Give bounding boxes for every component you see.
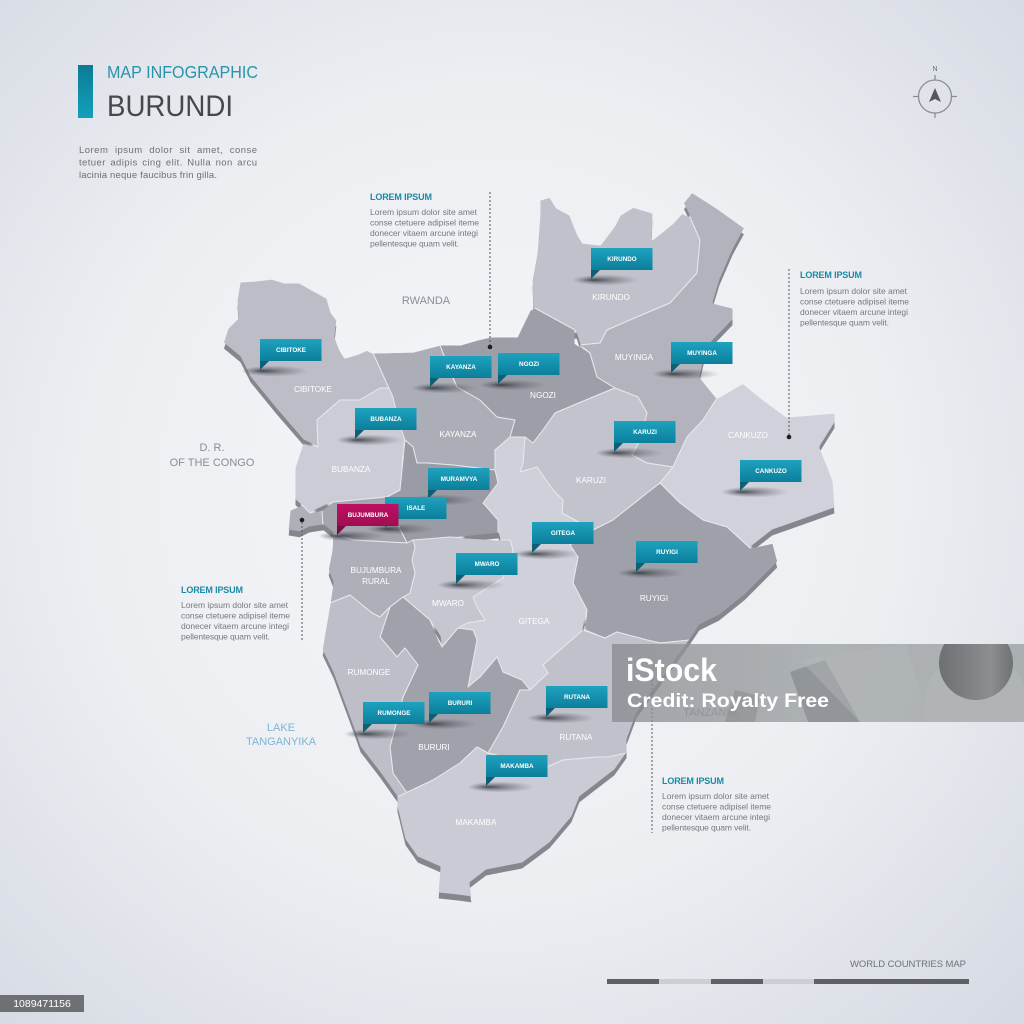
neighbouring country labels: RWANDA [402, 295, 451, 307]
region: Ngozi [440, 307, 615, 443]
region: Bubanza [295, 388, 405, 513]
intro text: lacinia neque faucibus frin gilla. [79, 170, 217, 181]
map: 3D side extrusion [223, 198, 835, 903]
flag: Cibitoke: CIBITOKE [276, 347, 306, 354]
flag: Rutana: RUTANA [564, 694, 591, 701]
flag: Gitega: GITEGA [551, 530, 576, 537]
province names on map: MWARO [432, 599, 464, 608]
flag: Muyinga [652, 342, 732, 380]
province names on map: CANKUZO [728, 431, 768, 440]
flag: Bubanza [336, 408, 416, 446]
region: Muramvya [387, 440, 498, 543]
flag: Bururi: BURURI [448, 700, 472, 707]
neighbouring country labels: TANZANIA [683, 707, 737, 719]
callout: north: Lorem ipsum dolor site amet [370, 207, 478, 217]
neighbouring country labels: LAKE [267, 722, 295, 734]
province names on map: MAKAMBA [456, 818, 497, 827]
callout: west [181, 518, 304, 642]
map: Burundi provinces [223, 192, 835, 897]
flag: Makamba: MAKAMBA [500, 763, 534, 770]
flag: Bujumbura (capital) [318, 504, 398, 542]
province names on map: GITEGA [519, 617, 550, 626]
province names on map: BUBANZA [332, 465, 371, 474]
province names on map [294, 293, 768, 827]
province names on map: KAYANZA [439, 430, 477, 439]
callout: south-east: donecer vitaem arcune integi [662, 812, 770, 822]
flag: Isale [366, 497, 446, 534]
icon: compass: N [932, 66, 938, 73]
intro text [79, 145, 257, 181]
flag: Rumonge: RUMONGE [378, 710, 410, 717]
region: Cankuzo [660, 383, 835, 548]
callout: west: pellentesque quam velit. [181, 632, 270, 642]
province names on map: NGOZI [530, 391, 556, 400]
flag: Mwaro [437, 553, 518, 590]
region: Kayanza [373, 345, 515, 470]
callout: south-east: pellentesque quam velit. [662, 822, 751, 832]
intro text: tetuer adipis cing elit. Nulla non arcu [79, 158, 257, 168]
flag: Ngozi [479, 353, 560, 390]
province names on map: BURURI [418, 743, 450, 752]
title: BURUNDI [107, 90, 233, 123]
callout: north: pellentesque quam velit. [370, 238, 459, 248]
neighbouring country labels: OF THE CONGO [170, 457, 255, 469]
callout: north: conse ctetuere adipisel iteme [370, 218, 479, 228]
title accent bar [78, 65, 93, 118]
region: Bujumbura Mairie [288, 505, 323, 532]
flag: Kirundo [572, 248, 652, 286]
callout: east: Lorem ipsum dolor site amet [800, 286, 908, 296]
callout: north: donecer vitaem arcune integi [370, 228, 478, 238]
flag: Muramvya: MURAMVYA [441, 476, 478, 483]
image id tag [0, 995, 84, 1012]
province names on map: RUYIGI [640, 594, 668, 603]
watermark banner [612, 644, 1024, 722]
title block [78, 62, 258, 123]
flag: Cibitoke [241, 339, 322, 376]
province names on map: RUTANA [559, 733, 593, 742]
neighbouring country labels: D. R. [199, 442, 225, 454]
callout: west: LOREM IPSUM [181, 585, 243, 595]
region: Mwaro [403, 537, 513, 647]
callout: west: donecer vitaem arcune integi [181, 621, 289, 631]
region: Rutana [488, 630, 690, 767]
scale bar [607, 959, 969, 984]
flag: Bururi [410, 692, 490, 730]
flag: Muramvya [409, 468, 490, 506]
flag: Cankuzo: CANKUZO [755, 468, 787, 475]
callout: south-east [652, 680, 771, 833]
callout: east: LOREM IPSUM [800, 270, 862, 280]
region: Gitega [458, 437, 593, 690]
callout: east [787, 269, 909, 439]
callout: east: conse ctetuere adipisel iteme [800, 296, 909, 306]
flag: Bujumbura (capital): BUJUMBURA [348, 512, 389, 519]
flag: Bubanza: BUBANZA [370, 416, 402, 423]
flag: Muyinga: MUYINGA [687, 350, 717, 357]
flag: Karuzi [595, 421, 676, 458]
province names on map: KARUZI [576, 476, 606, 485]
image id tag: 1089471156 [13, 998, 71, 1010]
watermark banner: iStock [626, 652, 717, 688]
region: Ruyigi [570, 483, 778, 643]
region: Karuzi [520, 388, 673, 530]
region: Muyinga [580, 192, 745, 467]
flag: Ruyigi [617, 541, 698, 578]
watermark banner: Credit: Royalty Free [627, 691, 829, 712]
callout: north [370, 192, 492, 349]
neighbouring country labels: TANGANYIKA [246, 736, 317, 748]
callout: south-east: Lorem ipsum dolor site amet [662, 791, 770, 801]
callout: south-east: LOREM IPSUM [662, 776, 724, 786]
icon: compass [913, 66, 957, 118]
scale bar: WORLD COUNTRIES MAP [850, 959, 966, 970]
province names on map: RURAL [362, 577, 390, 586]
flag: Kayanza: KAYANZA [446, 364, 476, 371]
province names on map: BUJUMBURA [351, 566, 402, 575]
callout: north: LOREM IPSUM [370, 192, 432, 202]
province names on map: MUYINGA [615, 353, 654, 362]
flag: Ngozi: NGOZI [519, 361, 539, 368]
callout: east: pellentesque quam velit. [800, 318, 889, 328]
province names on map: KIRUNDO [592, 293, 630, 302]
province names on map: CIBITOKE [294, 385, 333, 394]
flag: Karuzi: KARUZI [633, 429, 657, 436]
region: Bujumbura Rural [328, 533, 415, 617]
flag: Cankuzo [721, 460, 802, 498]
callout: west: conse ctetuere adipisel iteme [181, 610, 290, 620]
flag: Ruyigi: RUYIGI [656, 549, 678, 556]
flag: Rutana [527, 686, 608, 724]
region: Bururi [380, 597, 530, 793]
region: Makamba [397, 747, 627, 897]
region: Kirundo [532, 197, 700, 345]
flag: Isale: ISALE [407, 505, 425, 512]
intro text: Lorem ipsum dolor sit amet, conse [79, 145, 257, 156]
flag: Makamba [467, 755, 548, 792]
region: Cibitoke [223, 279, 393, 447]
neighbouring country labels [170, 295, 737, 748]
callout: west: Lorem ipsum dolor site amet [181, 600, 289, 610]
callout: east: donecer vitaem arcune integi [800, 307, 908, 317]
subtitle: MAP INFOGRAPHIC [107, 62, 258, 82]
province names on map: RUMONGE [348, 668, 391, 677]
callout: south-east: conse ctetuere adipisel iteme [662, 802, 771, 812]
flag: Gitega [513, 522, 594, 560]
region: Rumonge [322, 595, 418, 797]
flag: Rumonge [344, 702, 424, 740]
flag: Mwaro: MWARO [475, 561, 500, 568]
flag: Kayanza [411, 356, 492, 394]
flag: Kirundo: KIRUNDO [607, 256, 637, 263]
region: Isale [322, 497, 407, 543]
